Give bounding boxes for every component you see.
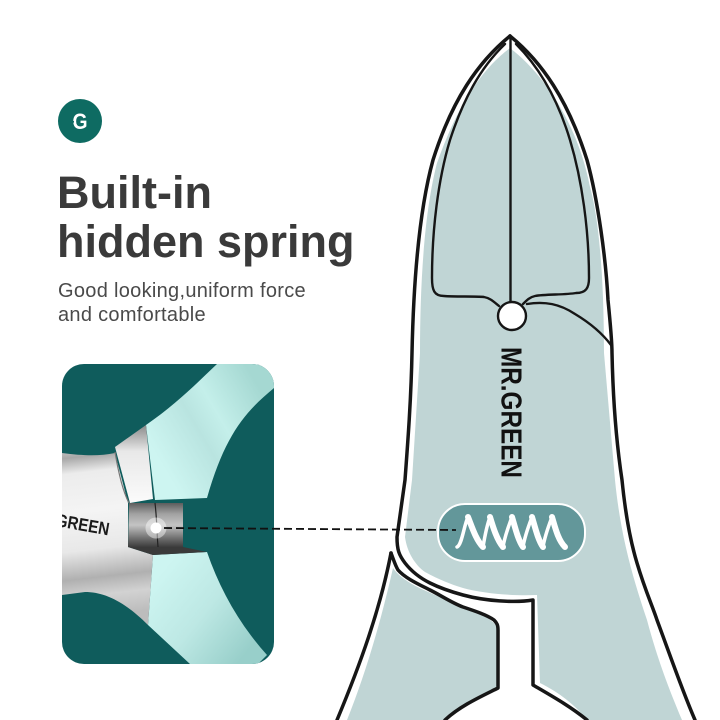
- metal body: [62, 453, 153, 625]
- panel: hinge close-up photo: [54, 364, 274, 664]
- pivot circle: [498, 302, 526, 330]
- icon: G badge: G: [72, 110, 88, 134]
- brand text on metal: GREEN: [54, 510, 111, 539]
- title: Built-in: [57, 167, 212, 218]
- hinge barrel: [128, 503, 183, 547]
- metal shoulder: [115, 425, 153, 503]
- icon: G badge: [58, 99, 102, 143]
- title: [57, 167, 354, 267]
- marker dot: [150, 522, 162, 534]
- icon: spring coil: [457, 517, 565, 547]
- description: and comfortable: [58, 304, 206, 326]
- callout: dashed leader line: [164, 528, 456, 530]
- description: Good looking,uniform force: [58, 280, 306, 302]
- lower mint handle: [148, 552, 267, 664]
- clipper fill: lower handle: [347, 568, 498, 720]
- description: [58, 280, 306, 326]
- title: hidden spring: [57, 216, 354, 267]
- hinge underside: [128, 547, 207, 555]
- brand label: MR.GREEN: MR.GREEN: [494, 347, 526, 478]
- upper mint handle: [146, 364, 274, 500]
- clipper fill: upper body: [405, 48, 682, 720]
- marker halo: [146, 518, 166, 538]
- clipper outline: [337, 36, 695, 720]
- spring badge: [438, 504, 585, 561]
